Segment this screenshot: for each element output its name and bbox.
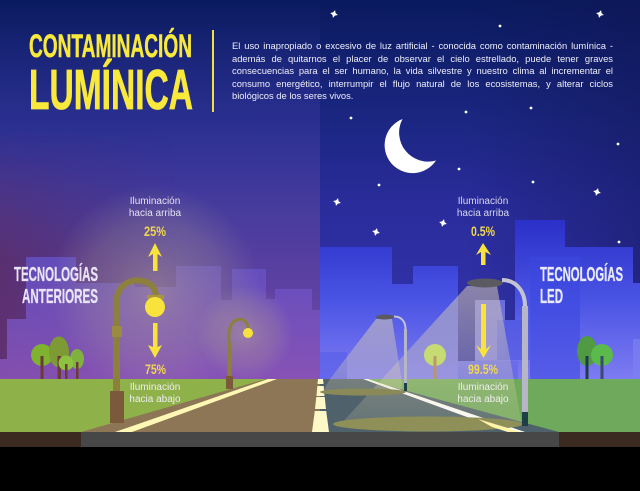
right road	[320, 379, 559, 432]
arrow: left down	[148, 323, 162, 358]
left green lawn	[0, 379, 320, 432]
road edge line left	[115, 379, 277, 432]
heading: older technologies: ANTERIORES	[22, 286, 98, 308]
moon	[385, 119, 436, 173]
right small street lamp	[376, 314, 407, 391]
label: left upward light: hacia arriba	[129, 208, 182, 219]
stars	[329, 9, 620, 243]
heading: older technologies	[14, 263, 98, 308]
left large street lamp	[110, 280, 165, 423]
heading: LED technologies	[540, 263, 623, 308]
value: 0.5%: 0.5%	[471, 223, 495, 239]
road curb and ground	[0, 432, 640, 447]
label: left downward light	[129, 382, 181, 405]
label: left upward light	[129, 196, 182, 219]
city skyline right	[320, 220, 640, 380]
label: right downward light	[457, 382, 509, 405]
city skyline left	[0, 257, 320, 380]
road edge line right	[363, 379, 525, 432]
label: left downward light: Iluminación	[130, 382, 180, 393]
intro text block	[232, 40, 613, 101]
light pollution glow	[50, 185, 293, 395]
value: 99.5%: 99.5%	[468, 361, 498, 377]
intro text block: El uso inapropiado o excesivo de luz artificial - conocida como contaminación lumínica -	[232, 40, 613, 51]
label: right upward light: Iluminación	[458, 196, 508, 207]
left road	[81, 379, 320, 432]
label: right downward light: hacia abajo	[457, 394, 509, 405]
title: CONTAMINACIÓN	[29, 28, 192, 64]
label: right upward light	[457, 196, 510, 219]
light cones from LED lamps	[320, 286, 523, 432]
value: 25%: 25%	[144, 223, 166, 239]
heading: older technologies: TECNOLOGÍAS	[14, 263, 98, 286]
intro text block: consecuencias para el ser humano, la vida silvestre y nuestro clima al incrementar el	[232, 65, 613, 76]
label: right downward light: Iluminación	[458, 382, 508, 393]
title divider	[212, 30, 214, 112]
title	[29, 28, 193, 122]
intro text block: biológicos de los seres vivos.	[232, 90, 353, 101]
arrow: right up	[476, 243, 491, 265]
label: right upward light: hacia arriba	[457, 208, 510, 219]
sky background	[0, 0, 640, 380]
left small street lamp	[226, 319, 253, 389]
label: left upward light: Iluminación	[130, 196, 180, 207]
label: left downward light: hacia abajo	[129, 394, 181, 405]
value: 75%: 75%	[145, 361, 166, 377]
title: LUMÍNICA	[29, 58, 193, 122]
trees right	[424, 336, 613, 379]
right large street lamp	[467, 278, 528, 426]
right green lawn	[320, 379, 640, 432]
intro text block: consumo energético, interrumpir el flujo natural de los ecosistemas, y alterar ciclos	[232, 78, 613, 88]
arrow: left up	[148, 243, 162, 271]
road centre dashes	[312, 379, 329, 432]
intro text block: además de quitarnos el placer de observar el cielo estrellado, puede tener graves	[232, 52, 613, 64]
trees left	[31, 336, 84, 379]
arrow: right down	[476, 304, 491, 358]
heading: LED technologies: LED	[540, 286, 563, 308]
